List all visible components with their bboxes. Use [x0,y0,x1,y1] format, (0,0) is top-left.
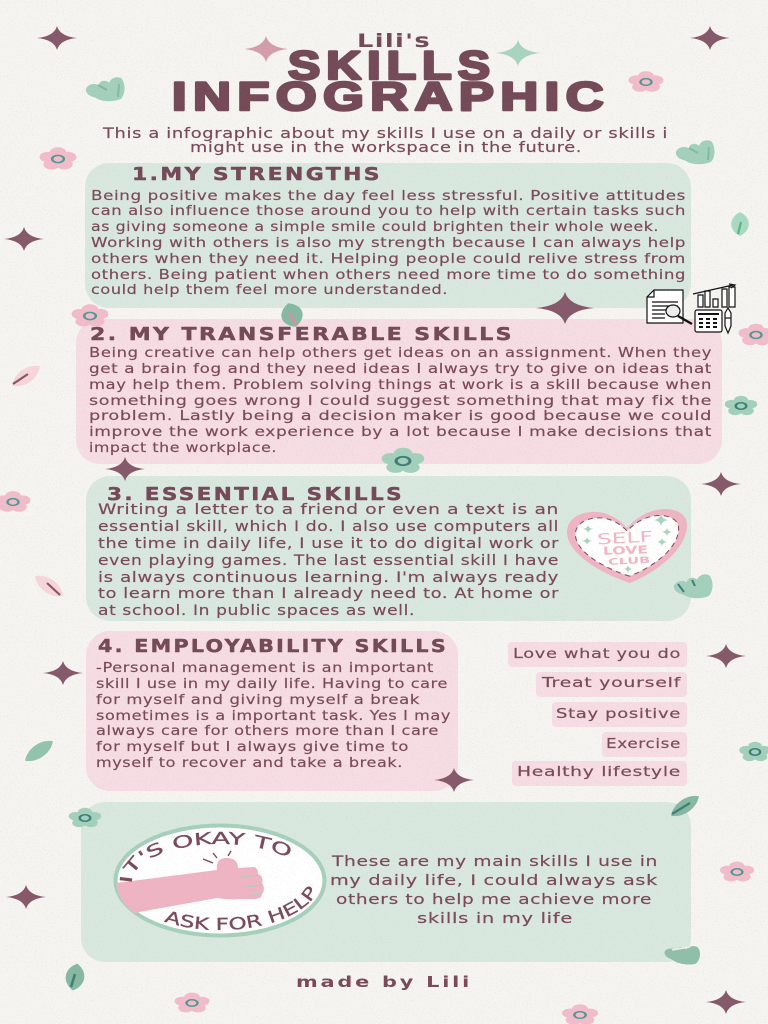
flower: bottom left pink [175,992,209,1012]
icon: self love club heart: LOVE [603,543,648,558]
leaf: green bush panel three [674,574,713,598]
flower: bottom middle pink [562,1004,598,1024]
heading: essential skills: 3. ESSENTIAL SKILLS [107,484,404,505]
heading: transferable skills: 2. MY TRANSFERABLE SKILLS [90,324,514,345]
flower: green between panels [382,448,424,473]
text block: transferable body: improve the work experience by a lot because I make decisions that [89,425,712,440]
text block: transferable body: get a brain fog and they need ideas I always try to give on ideas that [89,362,712,377]
text block: employability body: myself to recover and take a break. [96,756,403,771]
text block: essential body: to learn more than I already need to. At home or [98,586,559,602]
text block: transferable body: problem. Lastly being a decision maker is good because we could [89,409,712,424]
text block: strengths body [91,189,686,298]
flower: left edge pink [0,491,30,512]
sparkle: corner of panel four [434,768,474,792]
title: Lili's [357,30,431,52]
leaf: closing panel corner [663,942,701,966]
title: SKILLS [288,44,496,88]
heading: my strengths: 1.MY STRENGTHS [132,164,382,185]
text block: transferable body: Being creative can help others get ideas on an assignment. When they [89,346,712,361]
tag: exercise: Exercise [606,737,681,752]
text block: closing note: skills in my life [417,911,573,927]
flower: green closing panel [69,808,101,827]
flower: green right [725,396,757,415]
intro text [102,126,668,156]
sparkle: right of panel three [701,472,741,496]
flower: panel two corner pink [72,304,108,326]
sparkle: under panel two [105,457,145,481]
sparkle: top right [690,26,730,50]
title [172,30,610,119]
icon: self love club heart [567,509,687,583]
text block: essential body: the time in daily life, I use it to do digital work or [98,536,559,552]
sparkle: pink title [244,36,288,62]
text block: employability body: for myself but I always give time to [96,740,409,755]
text block: essential body: Writing a letter to a friend or even a text is an [98,502,559,518]
leaf: between panels [278,300,306,330]
flower: left pink [40,147,76,170]
text block: employability body: skill I use in my daily life. Having to care [96,677,448,692]
heading: employability skills: 4. EMPLOYABILITY SKILLS [98,636,448,657]
icon: self love club heart: SELF [596,528,653,548]
tag: love what you do [508,642,687,667]
tag: treat yourself [536,672,687,697]
text block: strengths body: can also influence those around you to help with certain tasks such [91,204,686,219]
flower: green right edge [739,742,768,761]
text block: strengths body: others when they need it. Helping people could relive stress from [91,252,686,267]
text block: essential body: at school. In public spaces as well. [98,603,415,619]
tag: healthy lifestyle [512,761,687,786]
leaf: green bush right [676,140,715,164]
panel: closing note [81,802,691,962]
icon: self love club heart: CLUB [608,556,651,568]
text block: strengths body: as giving someone a simple smile could brighten their whole week. [91,220,659,235]
tag: stay positive [552,702,687,727]
text block: strengths body: others. Being patient when others need more time to do something [91,268,686,283]
title: INFOGRAPHIC [172,75,610,119]
text block: strengths body: could help them feel more understanded. [91,283,448,298]
text block: employability body: always care for others more than I care [96,724,439,739]
sparkle: left of panel one [4,227,44,251]
sparkle: left of closing panel [6,885,46,909]
tag: healthy lifestyle: Healthy lifestyle [517,765,681,780]
sparkle: left of panel four [43,661,83,685]
tag: exercise [602,732,687,757]
text block: transferable body: may help them. Problem solving things at work is a skill because when [89,378,712,393]
badge: it's okay to ask for help: ASK FOR HELP [164,886,312,930]
flower: right edge pink [739,324,768,345]
sparkle: bottom right [706,990,746,1014]
leaf: closing panel top right [667,791,703,821]
leaf: left pink lower [31,570,67,602]
text block: closing note: These are my main skills I use in [331,854,658,870]
text block: transferable body [89,346,712,456]
text block: employability body: for myself and giving myself a break [96,693,420,708]
text block: strengths body: Being positive makes the day feel less stressful. Positive attitudes [91,189,686,204]
panel: essential skills [86,476,691,621]
footer credit: made by Lili [296,973,472,991]
text block: transferable body: impact the workplace. [89,441,277,456]
text block: transferable body: something goes wrong I could suggest something that may fix the [89,394,712,409]
leaf: bottom left [64,962,86,992]
leaf: left of panel four [21,736,57,766]
badge: it's okay to ask for help [114,824,326,938]
badge: it's okay to ask for help: IT'S OKAY TO [120,832,291,882]
panel: employability skills [86,631,458,791]
text block: closing note: others to help me achieve more [336,892,652,908]
icon: thumbs up arm [116,858,264,913]
sparkle: green title [496,40,540,66]
text block: essential body: essential skill, which I do. I also use computers all [98,519,559,535]
sparkle: right of tags [706,644,746,668]
icon: business documents and calculator [647,284,735,333]
intro text: This a infographic about my skills I use on a daily or skills i [102,126,668,142]
leaf: green bush top left [86,77,125,101]
tag: treat yourself: Treat yourself [541,676,681,691]
text block: essential body [98,502,559,619]
text block: essential body: is always continuous learning. I'm always ready [98,570,559,586]
flower: top right pink [629,71,663,92]
tag: stay positive: Stay positive [556,707,681,722]
intro text: might use in the workspace in the future. [190,140,582,156]
text block: strengths body: Working with others is also my strength because I can always help [91,236,686,251]
panel: my strengths [85,163,691,308]
leaf: left pink [8,360,44,392]
sparkle: between panels one and two [536,292,594,324]
text block: employability body: sometimes is a important task. Yes I may [96,709,451,724]
text block: essential body: even playing games. The last essential skill I have [98,553,559,569]
text block: employability body: -Personal management is an important [96,661,434,676]
sparkle: top left [37,26,77,50]
panel: transferable skills [76,319,722,464]
flower: right closing pink [720,861,754,881]
text block: closing note: my daily life, I could always ask [330,873,658,889]
text block: employability body [96,661,451,771]
text block: closing note [330,854,658,927]
tag: love what you do: Love what you do [513,647,681,662]
leaf: right of panel one [731,212,749,236]
